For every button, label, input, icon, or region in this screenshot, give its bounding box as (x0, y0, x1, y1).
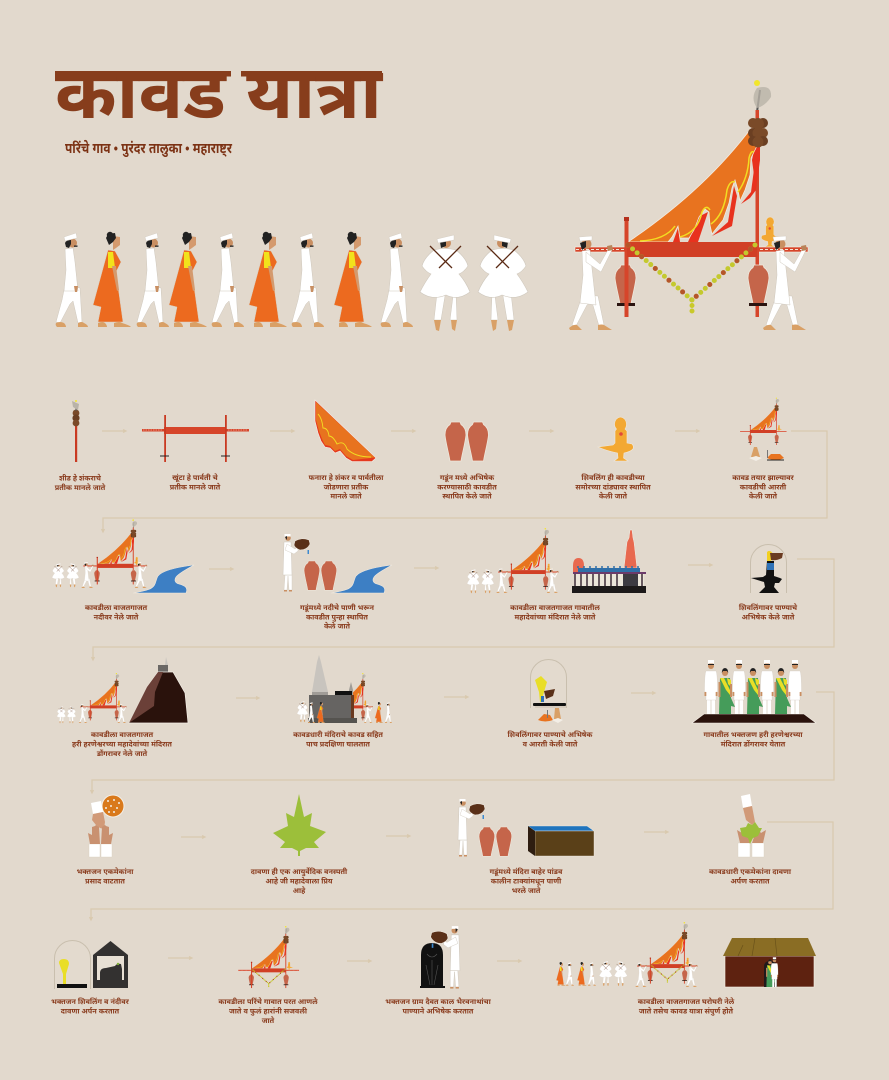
step 5: shivling (575, 417, 651, 501)
caption: पाण्याने अभिषेक करतात (403, 1007, 474, 1016)
caption: भक्तजन एकमेकांना (77, 866, 134, 876)
step 16: leaf (251, 794, 348, 895)
icon: arch with shivling (750, 544, 786, 593)
step 21: bhairavnath abhishek (385, 926, 492, 1016)
caption: आहे जी महादेवाला प्रिय (265, 877, 333, 886)
icon: black deity (420, 943, 445, 988)
caption: आहे (293, 886, 306, 895)
step 15: prasad (77, 795, 134, 886)
kavad with carriers (569, 80, 808, 330)
step 22: return home (556, 922, 816, 1017)
caption: कालीन टाक्यांमधून पाणी (491, 876, 562, 887)
caption: केले जाते (324, 622, 350, 631)
caption: कावड तयार झाल्यावर (732, 473, 795, 482)
icon: procession (57, 673, 127, 723)
connector row 3 to row 4 (90, 692, 834, 793)
step 8: fill pots at river (283, 534, 392, 631)
arrow (102, 430, 126, 432)
step 9: to village temple (467, 528, 646, 622)
caption: स्थापित केले जाते (442, 492, 492, 501)
arrow (644, 830, 668, 834)
icon: arch with lingam (54, 940, 90, 989)
step 6: kavad aarti (732, 398, 795, 501)
caption: कावडीत पुन्हा स्थापित (306, 613, 368, 623)
arrow (209, 568, 233, 570)
icon: shivling (598, 417, 633, 461)
drummers (420, 235, 528, 331)
caption: केली जाते (599, 492, 628, 501)
step 2: frame (142, 415, 249, 492)
step 20: kavad returns (218, 926, 318, 1025)
caption: गडूंन मध्ये अभिषेक (440, 472, 495, 483)
arrow (181, 836, 205, 838)
step 10: abhishek (739, 544, 798, 622)
icon: flag (315, 400, 376, 462)
caption: करण्यासाठी कावडीत (437, 483, 497, 492)
icon: procession (467, 528, 559, 593)
arrow (497, 960, 521, 962)
icon: procession (556, 922, 698, 987)
caption: अर्पण करतात (730, 877, 770, 886)
procession: walking devotees (56, 232, 413, 327)
caption: भक्तजन शिवलिंग व नंदीवर (51, 996, 130, 1006)
icon: frame (142, 415, 249, 462)
caption: गडूंमध्ये मंदिरा बाहेर पांडव (490, 866, 563, 877)
caption: प्रतीक मानले जाते (55, 483, 106, 492)
subtitle: परिंचे गाव • पुरंदर तालुका • महाराष्ट्र (65, 139, 233, 158)
icon: nandi shrine (93, 941, 128, 988)
icon: aarti lamp (749, 447, 784, 461)
icon: temple (572, 530, 646, 593)
icon: procession to river (52, 519, 194, 593)
caption: कावडीला वाजतगाजत गावातील (510, 603, 600, 612)
caption: मंदिरात डोंगरावर येतात (721, 739, 786, 749)
arrow (675, 430, 699, 432)
step 12: circumambulation (293, 655, 392, 749)
caption: भरले जाते (512, 886, 541, 895)
icon: hands with prasad (88, 795, 124, 857)
arrow (529, 430, 553, 432)
icon: pole (72, 400, 80, 462)
step 3: flag (309, 400, 384, 501)
arrow (347, 960, 371, 962)
arrow (386, 834, 410, 838)
icon: devotees group (692, 660, 816, 723)
icon: temple scene (297, 655, 392, 723)
caption: जाते तसेच कावड यात्रा संपुर्ण होते (639, 1006, 734, 1017)
caption: जाते (262, 1016, 275, 1025)
caption: प्रसाद वाटतात (85, 877, 125, 886)
caption: कावडधारी एकमेकांना दावणा (709, 866, 792, 876)
title: कावड यात्रा (55, 54, 384, 134)
arrow (391, 430, 415, 432)
caption: व आरती केली जाते (523, 740, 578, 749)
icon: lamp and offering (538, 708, 563, 723)
caption: शिवलिंग ही कावडीच्या (581, 473, 645, 482)
icon: davana leaf (273, 794, 326, 856)
caption: दावणा ही एक आयुर्वेदिक वनस्पती (251, 867, 348, 877)
icon: kavad (740, 398, 787, 445)
step 13: abhishek and aarti (508, 660, 593, 749)
icon: hands with leaf (737, 794, 766, 857)
step 11: to hill temple (57, 657, 188, 758)
step 1: pole (55, 400, 106, 492)
caption: जाते व फुलं हारांनी सजवली (229, 1006, 308, 1017)
step 19: offering at shivling and nandi (51, 940, 130, 1016)
caption: शिवलिंगावर पाण्याचे अभिषेक (508, 730, 593, 739)
caption: कावडीची आरती (740, 483, 787, 492)
arrow (631, 692, 655, 694)
step 7: to river (52, 519, 194, 622)
caption: कावडीला वाजतगाजत (91, 730, 154, 739)
connector row 4 to row 5 (90, 822, 833, 920)
caption: डोंगरावर नेले जाते (96, 749, 148, 758)
icon: arch with lingam (530, 660, 567, 708)
arrow (236, 696, 259, 700)
icon: tank (528, 826, 594, 856)
icon: hill (129, 657, 188, 723)
caption: गावातील भक्तजण हरी हरणेश्वरच्या (704, 730, 803, 739)
caption: फनारा हे शंकर व पार्वतीला (309, 472, 384, 482)
caption: शीड हे शंकराचे (59, 473, 102, 483)
connector row 2 to row 3 (92, 559, 834, 660)
caption: मानले जाते (330, 492, 362, 501)
caption: भक्तजन ग्राम दैवत काल भैरवनाथांचा (385, 996, 492, 1006)
arrow (270, 430, 294, 432)
caption: केली जाते (749, 492, 778, 501)
icon: decorated kavad (238, 926, 299, 988)
icon: man pouring (283, 534, 392, 593)
caption: समोरच्या दांड्यावर स्थापित (575, 482, 651, 492)
caption: कावडीला परिंचे गावात परत आणले (218, 997, 318, 1006)
caption: कावडीला वाजतगाजत (85, 603, 148, 612)
caption: खूंटा हे पार्वती चे (172, 472, 219, 483)
caption: शिवलिंगावर पाण्याचे (739, 603, 798, 612)
caption: पाच प्रदक्षिणा घालतात (306, 740, 370, 749)
icon: man pouring (431, 926, 460, 989)
caption: हरी हरणेश्वरच्या महादेवांच्या मंदिरात (72, 739, 172, 749)
icon: pots (479, 827, 512, 856)
caption: नदीवर नेले जाते (94, 613, 139, 622)
arrow (414, 566, 438, 570)
caption: जोडणारा प्रतीक (324, 483, 369, 492)
caption: कावडीला वाजतगाजत घरोघरी नेले (638, 997, 735, 1006)
arrow (688, 564, 712, 566)
caption: गडूंमध्ये नदीचे पाणी भरून (300, 602, 374, 613)
arrow (168, 956, 192, 960)
step 4: pots (437, 422, 497, 501)
caption: प्रतीक मानले जाते (170, 483, 221, 492)
caption: दावणा अर्पन करतात (61, 1007, 120, 1016)
caption: अभिषेक केले जाते (742, 613, 795, 622)
step 18: offering davana (709, 794, 792, 886)
icon: pots (445, 422, 488, 461)
icon: man pouring and pots (458, 799, 485, 856)
caption: कावडधारी मंदिराचे कावड सहित (293, 729, 383, 739)
arrow (444, 696, 468, 698)
caption: महादेवांच्या मंदिरात नेले जाते (515, 612, 596, 622)
icon: house (723, 938, 816, 987)
connector row 1 to row 2 (102, 431, 827, 532)
step 17: temple tank (458, 799, 594, 895)
step 14: devotees on hill (692, 660, 816, 749)
